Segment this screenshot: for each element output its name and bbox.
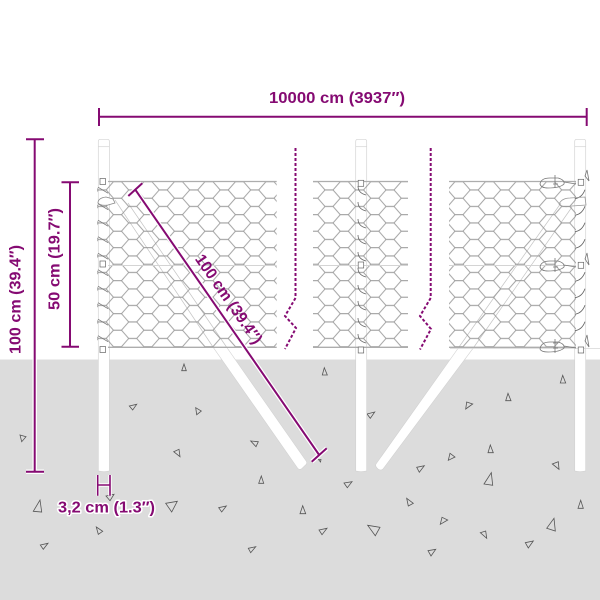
middle post [356, 139, 367, 472]
right post [575, 139, 586, 472]
mesh panel: middle [313, 182, 408, 347]
dimension: post diameter 3,2 cm [58, 475, 155, 516]
dimension: mesh height 50 cm: 50 cm (19.7″) [46, 208, 63, 310]
break mark: left [285, 148, 296, 349]
dimension: post height 100 cm [8, 139, 44, 472]
ground [0, 360, 600, 600]
mesh panel: right [449, 182, 585, 347]
post brackets [100, 178, 584, 353]
mesh panel: left [97, 182, 277, 347]
dimension: overall length 10000 cm [99, 90, 587, 126]
ground level line [450, 348, 600, 350]
dimension: overall length 10000 cm: 10000 cm (3937″) [269, 90, 405, 107]
dimension: brace length 100 cm: 100 cm (39.4″) [191, 252, 265, 348]
dimension: mesh height 50 cm [46, 182, 79, 347]
stones on the ground [20, 364, 583, 556]
left diagonal brace [115, 200, 307, 469]
tension clips on right post [540, 170, 589, 353]
dimension: brace length 100 cm [128, 183, 327, 462]
break mark: right [420, 148, 431, 350]
dimension: post diameter 3,2 cm: 3,2 cm (1.3″) [58, 499, 155, 516]
left post [98, 139, 109, 472]
dimension: post height 100 cm: 100 cm (39.4″) [8, 245, 24, 354]
right diagonal brace [376, 203, 572, 470]
